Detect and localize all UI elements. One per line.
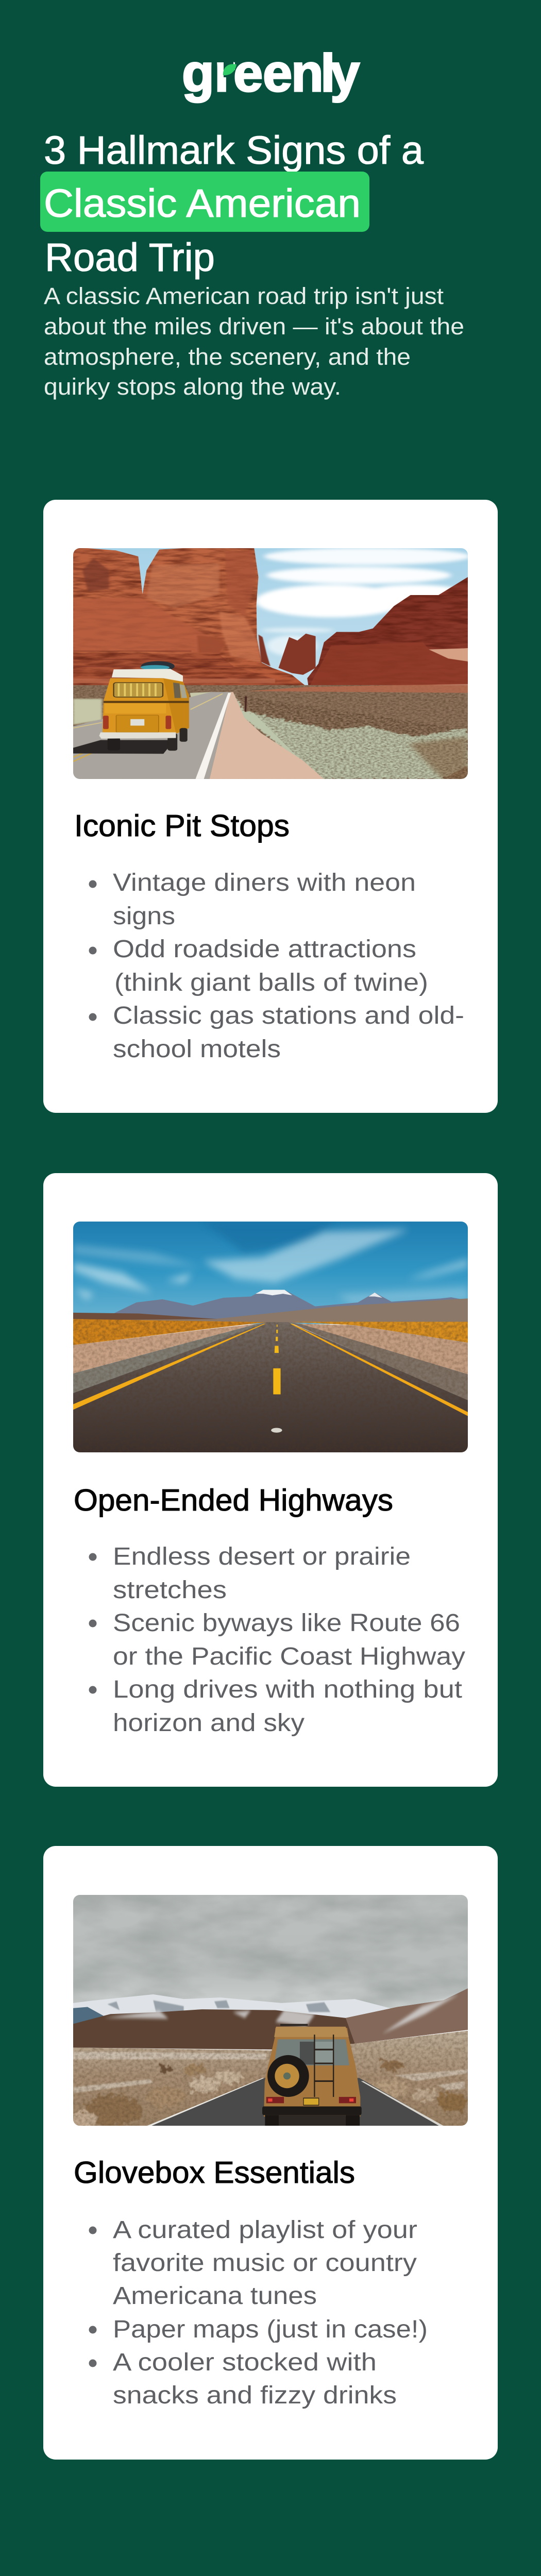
list: glovebox essentials: snacks and fizzy drinks — [113, 2382, 397, 2409]
title highlight — [40, 172, 369, 232]
panel: glovebox essentials — [43, 1846, 498, 2460]
list: glovebox essentials: Paper maps (just in case!) — [113, 2316, 428, 2343]
title: Classic American — [44, 181, 361, 226]
list: glovebox essentials — [89, 2216, 428, 2409]
yellow van — [99, 661, 189, 751]
list: open-ended highways: or the Pacific Coast Highway — [113, 1643, 465, 1670]
list: iconic pit stops — [89, 869, 464, 1063]
panel: iconic pit stops — [43, 500, 498, 1113]
icon: leaf — [223, 64, 236, 75]
list: open-ended highways: Endless desert or prairie — [113, 1543, 411, 1570]
photo: straight desert highway — [73, 1222, 468, 1452]
list: open-ended highways: Long drives with nothing but — [113, 1676, 462, 1703]
list: iconic pit stops: school motels — [113, 1036, 281, 1063]
list: iconic pit stops: signs — [113, 903, 175, 930]
photo: camper van on a winter road — [72, 1895, 468, 2127]
list: open-ended highways: stretches — [113, 1577, 227, 1604]
intro paragraph: A classic American road trip isn't just — [44, 283, 444, 309]
camper van — [262, 2024, 362, 2126]
list: iconic pit stops: (think giant balls of twine) — [114, 969, 428, 996]
list: open-ended highways: horizon and sky — [113, 1709, 305, 1737]
list: glovebox essentials: A cooler stocked with — [113, 2349, 377, 2376]
list: glovebox essentials: Americana tunes — [113, 2282, 317, 2310]
title: Road Trip — [45, 235, 215, 280]
list: open-ended highways: Scenic byways like Route 66 — [113, 1609, 460, 1637]
list: iconic pit stops: Vintage diners with neon — [113, 869, 416, 896]
list: glovebox essentials: favorite music or country — [113, 2249, 417, 2277]
logo: greenly: greenly — [182, 43, 360, 103]
intro paragraph: quirky stops along the way. — [44, 374, 341, 400]
photo: yellow van in red rock desert — [73, 548, 470, 779]
van shadow — [73, 740, 175, 754]
intro paragraph: atmosphere, the scenery, and the — [44, 344, 411, 370]
title: 3 Hallmark Signs of a — [44, 128, 424, 173]
intro paragraph — [44, 283, 464, 400]
heading: iconic pit stops: Iconic Pit Stops — [74, 809, 290, 843]
title — [40, 128, 424, 280]
list: open-ended highways — [89, 1543, 465, 1737]
heading: glovebox essentials: Glovebox Essentials — [74, 2156, 355, 2190]
heading: open-ended highways: Open-Ended Highways — [74, 1483, 393, 1517]
list: iconic pit stops: Odd roadside attractions — [113, 936, 416, 963]
list: iconic pit stops: Classic gas stations and old- — [113, 1002, 464, 1029]
list: glovebox essentials: A curated playlist of your — [113, 2216, 417, 2244]
panel: open-ended highways — [43, 1173, 498, 1787]
intro paragraph: about the miles driven — it's about the — [44, 313, 464, 340]
